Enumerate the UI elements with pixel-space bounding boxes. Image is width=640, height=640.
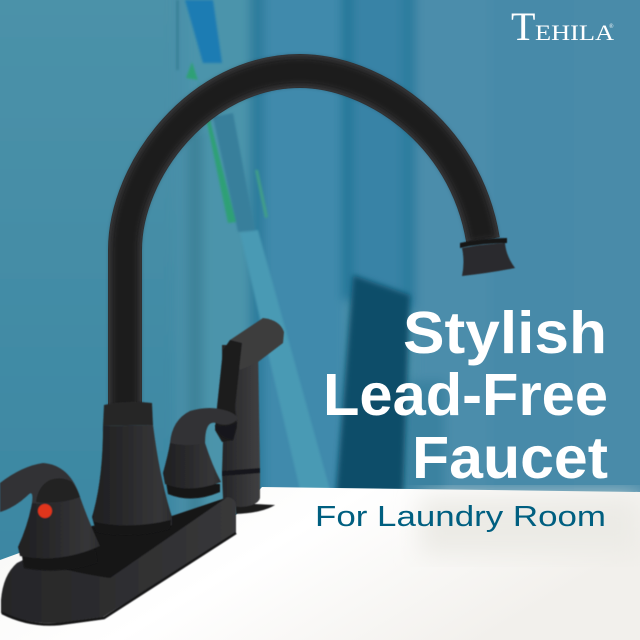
brand logo xyxy=(511,4,614,49)
right handle xyxy=(163,408,238,499)
aerator tip xyxy=(460,238,515,276)
blurred brush handle behind the faucet xyxy=(176,0,330,490)
headline: Faucet xyxy=(412,425,608,491)
headline: Stylish xyxy=(403,300,607,366)
headline xyxy=(323,300,608,491)
brand logo: ® xyxy=(609,23,614,30)
sink basin xyxy=(0,487,640,640)
faucet xyxy=(0,71,515,625)
side spray xyxy=(215,318,284,514)
central cone xyxy=(92,402,172,535)
spout arc and stem xyxy=(125,71,483,415)
deck plate xyxy=(1,497,236,625)
headline: Lead-Free xyxy=(323,362,608,428)
subheading: For Laundry Room xyxy=(315,501,606,533)
brand logo: T xyxy=(511,4,535,49)
brand logo: EHILA xyxy=(535,20,614,45)
red hot-water indicator xyxy=(38,504,52,518)
left handle xyxy=(0,463,100,571)
